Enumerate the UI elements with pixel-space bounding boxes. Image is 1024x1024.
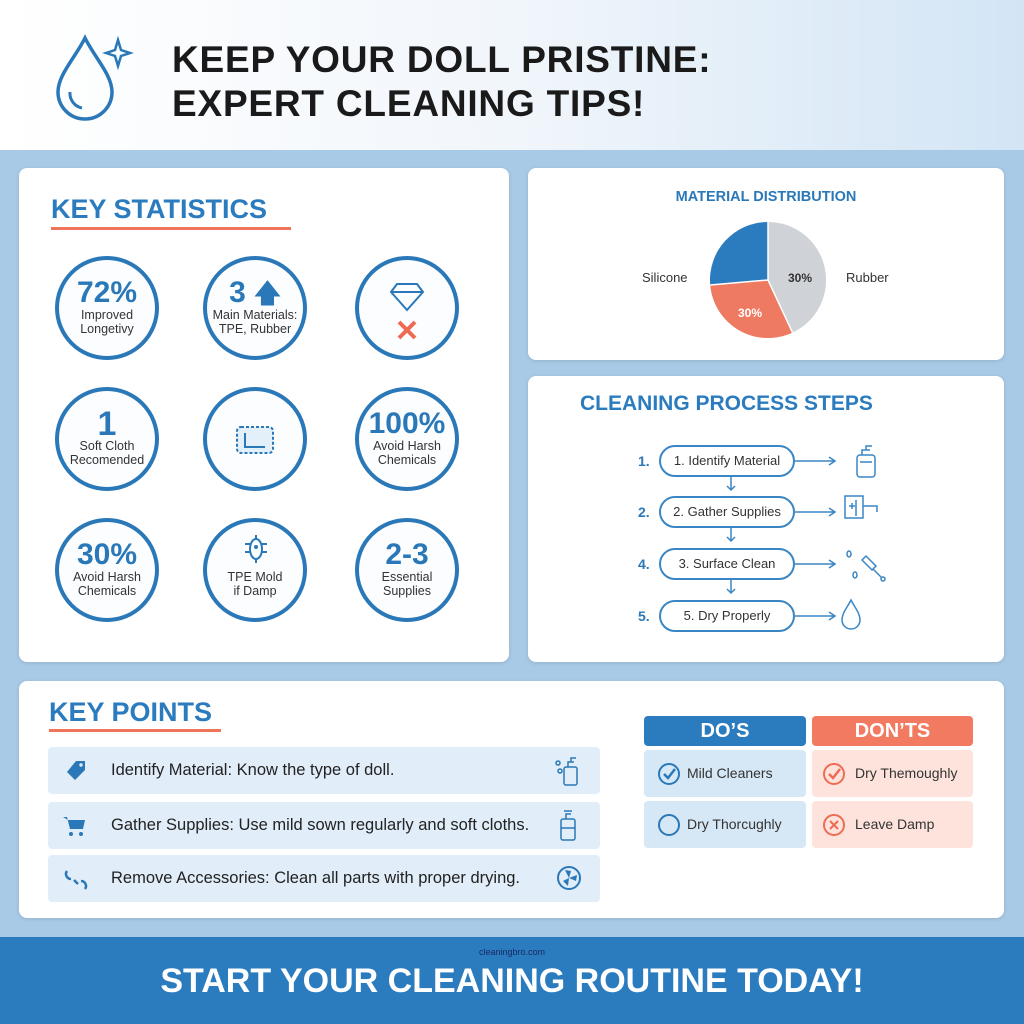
text: 4. [638, 556, 650, 572]
text: 5. Dry Properly [684, 608, 770, 623]
steps flow [726, 445, 886, 630]
heading: material distribution: MATERIAL DISTRIBUTION [676, 189, 856, 205]
heading: key statistics: KEY STATISTICS [51, 194, 267, 224]
step 1 [638, 445, 795, 477]
panel: key points [19, 681, 1004, 918]
do's column [644, 716, 806, 848]
panel: key statistics [19, 168, 509, 662]
stat TPE mold [203, 518, 307, 622]
do's column: Dry Thorcughly [687, 816, 782, 832]
don'ts column: Dry Themoughly [855, 765, 957, 781]
don'ts column: Leave Damp [855, 816, 934, 832]
stat 72%: 72% [77, 276, 137, 309]
text: 2. Gather Supplies [673, 504, 781, 519]
stat 72%: Improved [81, 308, 133, 322]
stat 1: Soft Cloth [80, 439, 134, 453]
pie chart: 30% [788, 271, 812, 285]
point 2: Gather Supplies: Use mild sown regularly and soft cloths. [111, 816, 529, 834]
footer call to action: START YOUR CLEANING ROUTINE TODAY! [160, 962, 864, 1000]
point 1: Identify Material: Know the type of doll. [111, 761, 394, 779]
do's column: DO’S [701, 720, 749, 742]
header [0, 0, 1024, 150]
label: rubber: Rubber [846, 270, 889, 285]
stat 3 [203, 256, 307, 360]
footer banner [0, 937, 1024, 1024]
stat 72% [55, 256, 159, 360]
panel: cleaning process steps [528, 376, 1004, 662]
stat TPE mold: if Damp [233, 584, 277, 598]
stat 1: Recomended [70, 453, 144, 467]
panel: material distribution [528, 168, 1004, 360]
title [172, 39, 711, 124]
stat 100%: Chemicals [378, 453, 436, 467]
stat 1: 1 [98, 405, 116, 443]
pie chart [710, 222, 826, 338]
point 2 [48, 802, 600, 849]
stat 30%: Chemicals [78, 584, 136, 598]
stat 2-3: Essential [382, 570, 432, 584]
text: 3. Surface Clean [679, 556, 775, 571]
icon: cloth [203, 387, 307, 491]
stat 3: 3 🡅 [229, 276, 281, 309]
heading: cleaning process steps: CLEANING PROCESS STEPS [580, 392, 873, 415]
title: EXPERT CLEANING TIPS! [172, 83, 645, 124]
label: silicone: Silicone [642, 270, 688, 285]
heading: key points: KEY POINTS [49, 697, 212, 727]
icon: diamond cross [355, 256, 459, 360]
text: 1. Identify Material [674, 453, 780, 468]
stat 30%: Avoid Harsh [73, 570, 141, 584]
step 5 [638, 600, 795, 632]
footer url: cleaningbro.com [479, 947, 545, 957]
stat 100%: Avoid Harsh [373, 439, 441, 453]
stat 30%: 30% [77, 538, 137, 571]
stat 100% [355, 387, 459, 491]
stat TPE mold: TPE Mold [228, 570, 282, 584]
pie chart: 30% [738, 306, 762, 320]
stat 2-3: 2-3 [385, 538, 429, 571]
text: 1. [638, 453, 650, 469]
point 3 [48, 855, 600, 902]
don'ts column [812, 716, 973, 848]
stat 3: Main Materials: [213, 308, 297, 322]
do's column: Mild Cleaners [687, 765, 773, 781]
text: 2. [638, 504, 650, 520]
step 2 [638, 496, 795, 528]
icon: water drop [56, 34, 134, 121]
text: 5. [638, 608, 650, 624]
point 1 [48, 747, 600, 794]
step 3 [638, 548, 795, 580]
stat 30% [55, 518, 159, 622]
stat 100%: 100% [369, 407, 445, 440]
stat 2-3: Supplies [383, 584, 431, 598]
don'ts column: DON’TS [855, 720, 930, 742]
stat 2-3 [355, 518, 459, 622]
title: KEEP YOUR DOLL PRISTINE: [172, 39, 711, 80]
point 3: Remove Accessories: Clean all parts with proper drying. [111, 869, 520, 887]
stat 1 [55, 387, 159, 491]
stat 72%: Longetivy [80, 322, 134, 336]
stat 3: TPE, Rubber [219, 322, 291, 336]
